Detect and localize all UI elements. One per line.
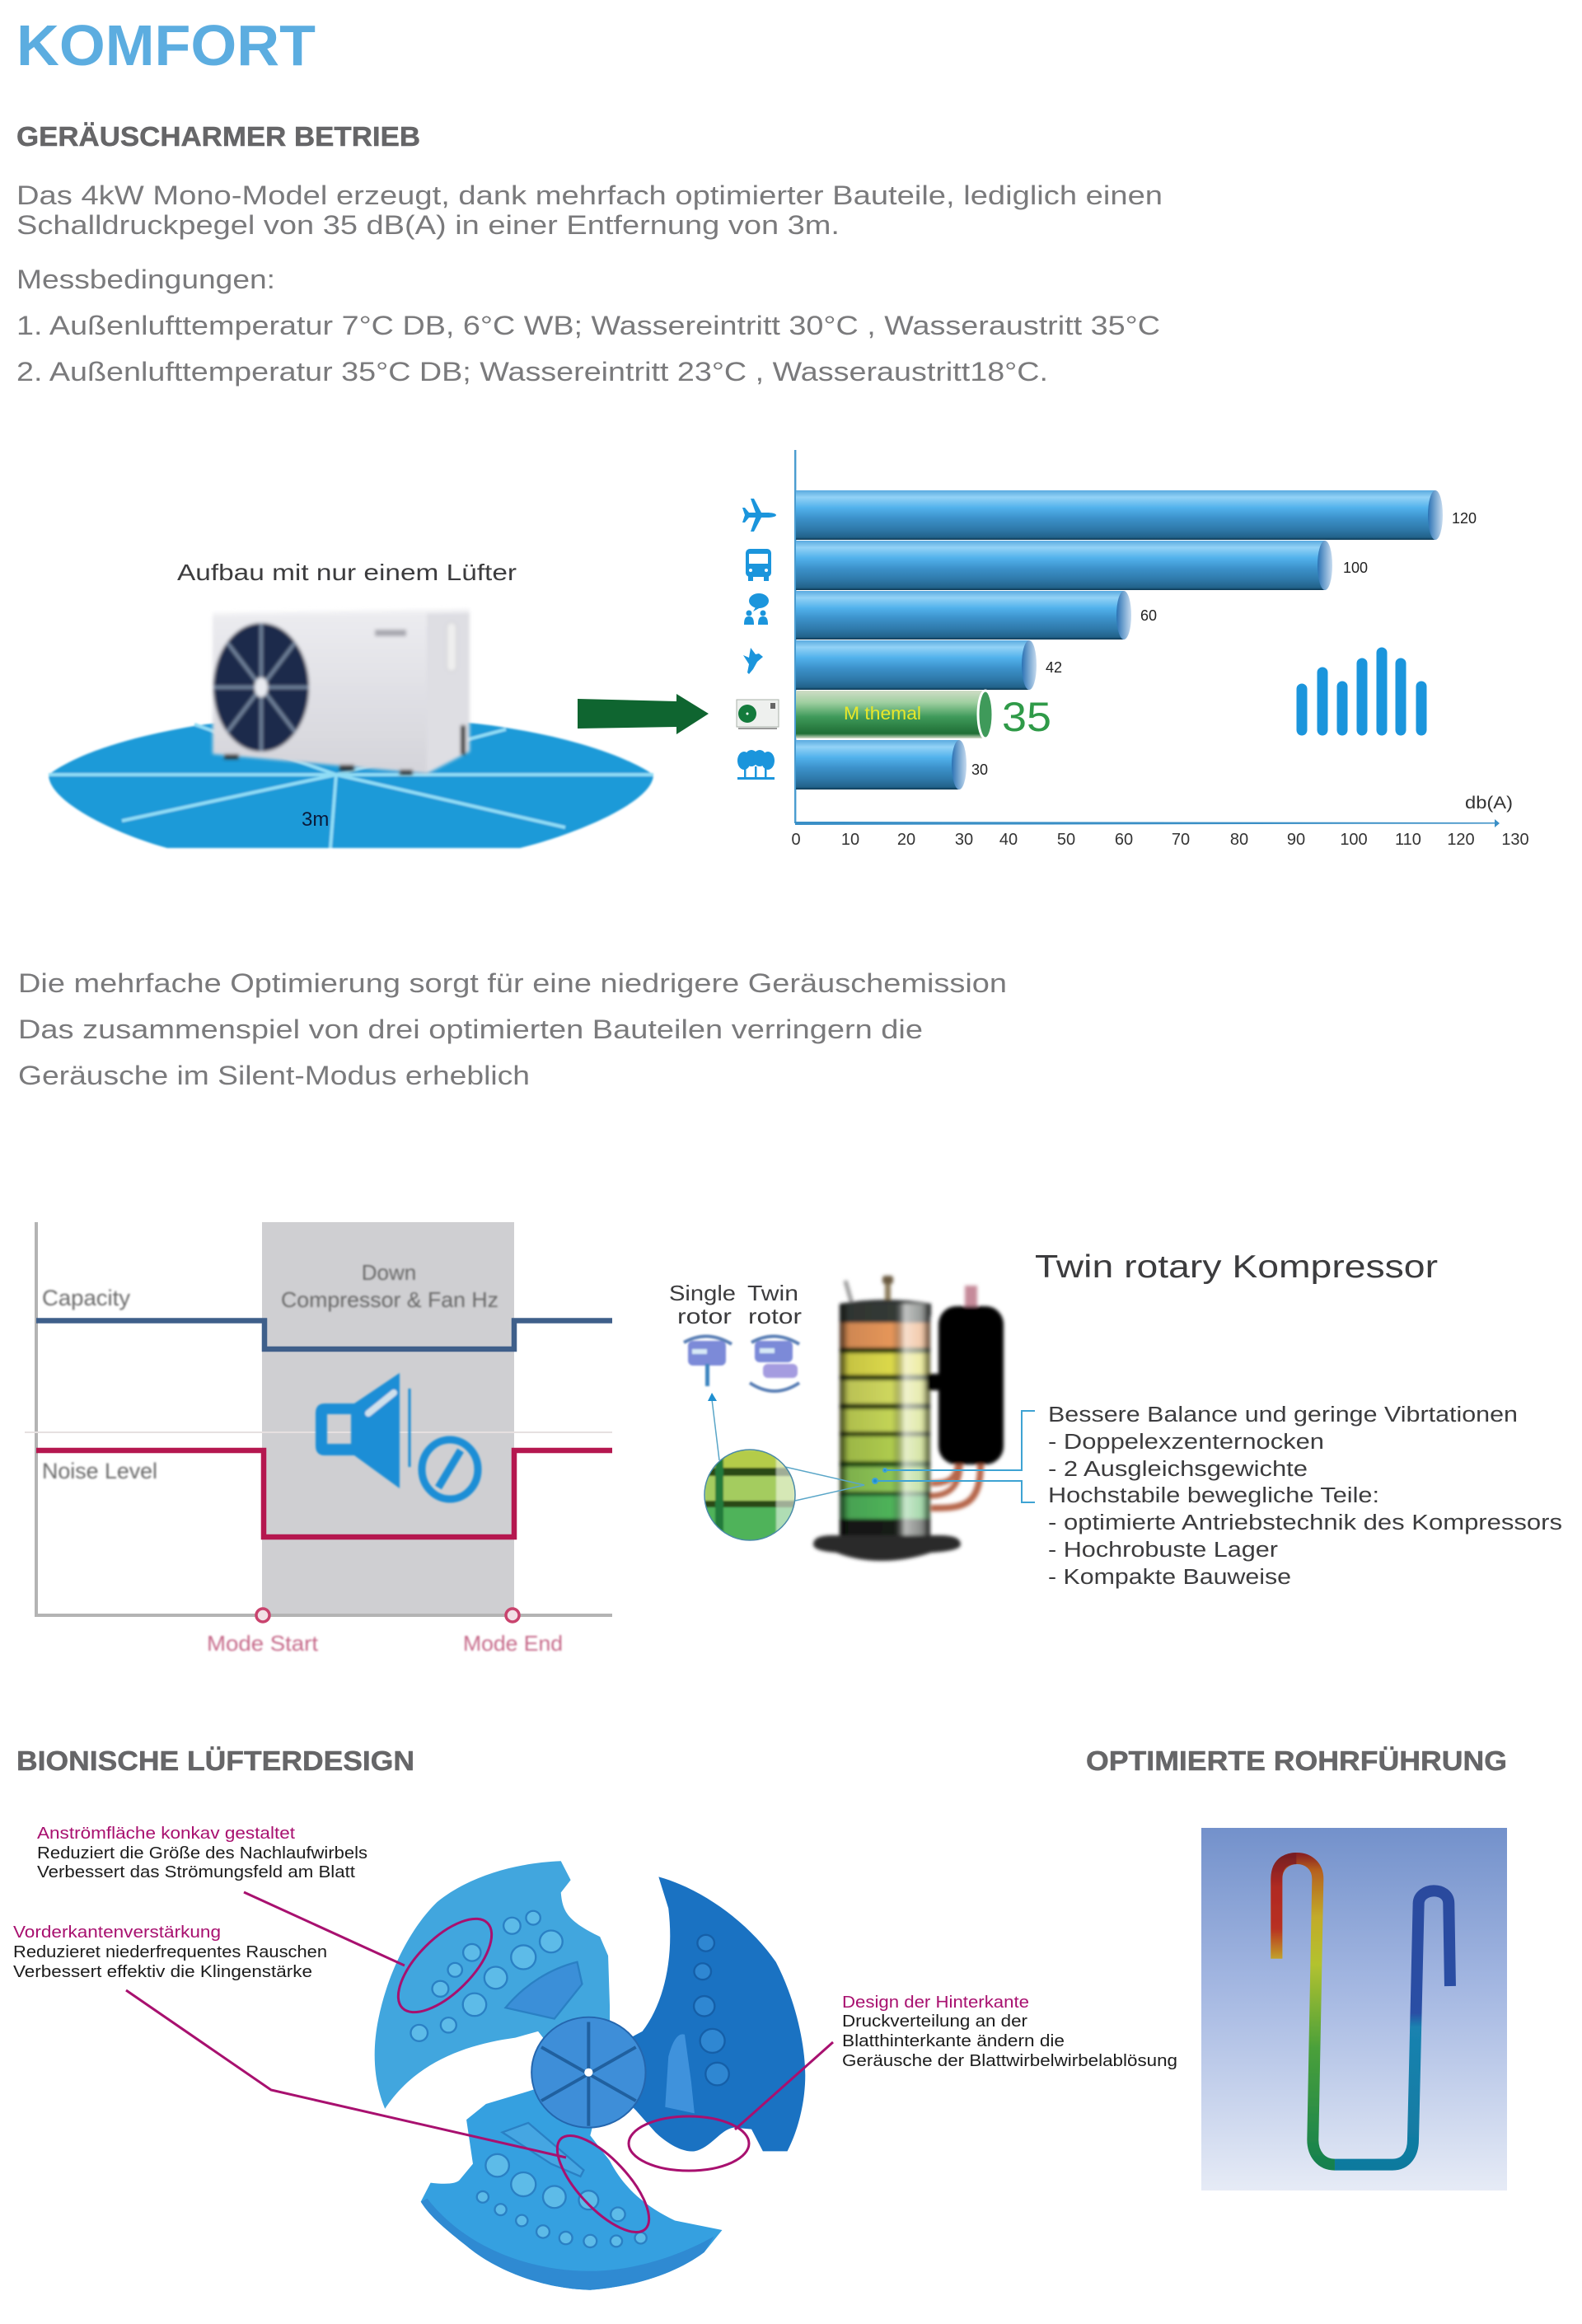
- fan blade: right: [606, 1877, 805, 2152]
- label: down compressor: Down: [362, 1260, 416, 1285]
- bar 30: 30: [971, 761, 988, 778]
- text block: intro and measuring conditions: Schalldruckpegel von 35 dB(A) in einer Entfernung von 3m.: [16, 210, 840, 240]
- icon: people talking: [744, 593, 769, 625]
- text block: optimisation: Die mehrfache Optimierung sorgt für eine niedrigere Geräuschemission: [18, 968, 1007, 998]
- bar chart: noise comparison: [737, 450, 1529, 849]
- label: twin rotor: [747, 1281, 802, 1328]
- bar 120: 120: [1452, 510, 1477, 527]
- marker: mode start: [207, 1609, 319, 1656]
- illustration: pipe routing simulation: [1201, 1828, 1507, 2190]
- callout: concave surface: Verbessert das Strömungsfeld am Blatt: [37, 1863, 355, 1881]
- axis labels: 60: [1115, 831, 1133, 849]
- bar 35: M thermal: [796, 691, 1051, 740]
- axes: [794, 450, 1500, 827]
- noise circle: [49, 719, 653, 848]
- bar 30: [796, 740, 988, 790]
- axis labels: 100: [1340, 831, 1368, 849]
- bar 120: [796, 490, 1477, 540]
- icon: twin rotor: [750, 1336, 799, 1391]
- axis labels: 20: [897, 831, 915, 849]
- label: down compressor: Compressor & Fan Hz: [281, 1287, 498, 1312]
- label: single rotor: Single: [669, 1281, 736, 1305]
- axis labels: 70: [1172, 831, 1190, 849]
- callout: concave surface: [37, 1825, 367, 1881]
- icon: sound level bars: [1302, 653, 1421, 730]
- text block: intro and measuring conditions: Das 4kW Mono-Model erzeugt, dank mehrfach optimierter Bauteile, lediglich einen: [16, 180, 1163, 210]
- text block: compressor features: Bessere Balance und geringe Vibrtationen: [1048, 1403, 1518, 1427]
- icon: trees: [737, 750, 775, 780]
- diagram: silent mode: [25, 1222, 612, 1656]
- axis labels: 30: [955, 831, 973, 849]
- mode window: [262, 1222, 514, 1615]
- label: 3m: 3m: [302, 808, 329, 831]
- text block: compressor features: - optimierte Antriebstechnik des Kompressors: [1048, 1511, 1562, 1534]
- label: noise level: Noise Level: [42, 1459, 157, 1483]
- axis labels: 80: [1230, 831, 1248, 849]
- illustration: bionic fan: [126, 1861, 833, 2290]
- heading: pipe routing: OPTIMIERTE ROHRFÜHRUNG: [1086, 1745, 1507, 1776]
- icon: muted speaker: [316, 1373, 478, 1499]
- axis labels: 90: [1287, 831, 1305, 849]
- axis labels: 120: [1447, 831, 1475, 849]
- label: single rotor: rotor: [677, 1304, 732, 1328]
- label: single rotor: [669, 1281, 736, 1328]
- callout: trailing edge: Druckverteilung an der: [842, 2012, 1027, 2031]
- bar 60: [796, 591, 1157, 640]
- text block: intro and measuring conditions: 1. Außenlufttemperatur 7°C DB, 6°C WB; Wassereintritt 30°C , Wasseraustritt 35°C: [16, 311, 1160, 340]
- axis labels: 10: [841, 831, 859, 849]
- text block: compressor features: [1048, 1403, 1562, 1589]
- axis labels: 0: [791, 831, 801, 849]
- text block: compressor features: - 2 Ausgleichsgewichte: [1048, 1458, 1308, 1481]
- callout leaders: [873, 1411, 1035, 1502]
- capacity line: [36, 1320, 612, 1349]
- illustration: outdoor unit on 3m noise circle: [49, 611, 653, 848]
- callout: trailing edge: [842, 1994, 1177, 2070]
- fan blade: top left: [375, 1861, 610, 2109]
- icon: single rotor: [684, 1336, 732, 1386]
- callout: leading edge: Vorderkantenverstärkung: [13, 1923, 221, 1942]
- marker: mode end: Mode End: [463, 1631, 563, 1656]
- marker: mode start: Mode Start: [207, 1631, 319, 1656]
- icon: airplane: [742, 499, 776, 532]
- callout: leading edge: Reduzieret niederfrequentes Rauschen: [13, 1943, 327, 1961]
- axis labels: 50: [1057, 831, 1075, 849]
- heading: quiet operation: GERÄUSCHARMER BETRIEB: [16, 121, 420, 152]
- blade details: [410, 1911, 647, 2247]
- text block: optimisation: Geräusche im Silent-Modus erheblich: [18, 1061, 530, 1090]
- callout: trailing edge: Design der Hinterkante: [842, 1994, 1029, 2012]
- callout: concave surface: Anströmfläche konkav gestaltet: [37, 1825, 295, 1843]
- axis labels: 40: [999, 831, 1018, 849]
- text block: compressor features: - Kompakte Bauweise: [1048, 1566, 1291, 1589]
- text block: optimisation: Das zusammenspiel von drei optimierten Bauteilen verringern die: [18, 1014, 923, 1044]
- text block: intro and measuring conditions: Messbedingungen:: [16, 265, 275, 294]
- axis labels: [791, 831, 1529, 849]
- fan hub: [531, 2017, 646, 2128]
- text block: optimisation: [18, 968, 1007, 1090]
- bar 35: M thermal: 35: [1002, 694, 1051, 740]
- bar 60: 60: [1140, 607, 1157, 624]
- compressor body: [813, 1276, 1004, 1561]
- noise level line: [36, 1450, 612, 1537]
- text block: compressor features: Hochstabile bewegliche Teile:: [1048, 1484, 1379, 1507]
- marker: mode end: [463, 1609, 563, 1656]
- callout: leading edge: [13, 1923, 327, 1981]
- axis labels: 110: [1395, 831, 1421, 849]
- heading: twin rotary compressor: Twin rotary Kompressor: [1035, 1249, 1438, 1285]
- bar 35: M thermal: M themal: [844, 703, 921, 724]
- arrow: to rotor: [708, 1393, 719, 1460]
- callout: trailing edge: Geräusche der Blattwirbelwirbelablösung: [842, 2052, 1177, 2070]
- label: down compressor: [281, 1260, 498, 1312]
- icon: M thermal unit: [737, 700, 779, 729]
- label: twin rotor: Twin: [747, 1281, 798, 1305]
- label: capacity: Capacity: [42, 1286, 131, 1310]
- arrow: points to chart: [578, 694, 709, 734]
- callout: leading edge: Verbessert effektiv die Klingenstärke: [13, 1963, 312, 1981]
- illustration: twin rotary compressor: [669, 1276, 1035, 1561]
- callout: trailing edge: Blatthinterkante ändern die: [842, 2032, 1065, 2050]
- bar 100: 100: [1343, 560, 1368, 576]
- text block: intro and measuring conditions: 2. Außenlufttemperatur 35°C DB; Wassereintritt 23°C , Wasseraustritt18°C.: [16, 357, 1048, 387]
- icon: bird: [743, 648, 763, 674]
- bar 100: [796, 541, 1368, 590]
- caption: single fan: Aufbau mit nur einem Lüfter: [177, 560, 517, 585]
- callout: concave surface: Reduziert die Größe des Nachlaufwirbels: [37, 1844, 367, 1862]
- text block: compressor features: - Hochrobuste Lager: [1048, 1539, 1279, 1562]
- heading: bionic fan: BIONISCHE LÜFTERDESIGN: [16, 1745, 414, 1776]
- label: twin rotor: rotor: [748, 1304, 802, 1328]
- axis labels: 130: [1501, 831, 1529, 849]
- magnifier: [704, 1450, 864, 1544]
- icon: bus: [746, 549, 771, 581]
- bar 42: [796, 640, 1062, 690]
- title: KOMFORT: [16, 13, 316, 77]
- fan blade: bottom: [421, 2082, 722, 2290]
- outdoor unit: [213, 611, 470, 775]
- callout lines and ellipses: [126, 1892, 833, 2246]
- unit label: db(A): [1465, 794, 1513, 813]
- text block: compressor features: - Doppelexzenternocken: [1048, 1431, 1324, 1454]
- bar 42: 42: [1046, 659, 1062, 676]
- text block: intro and measuring conditions: [16, 180, 1163, 387]
